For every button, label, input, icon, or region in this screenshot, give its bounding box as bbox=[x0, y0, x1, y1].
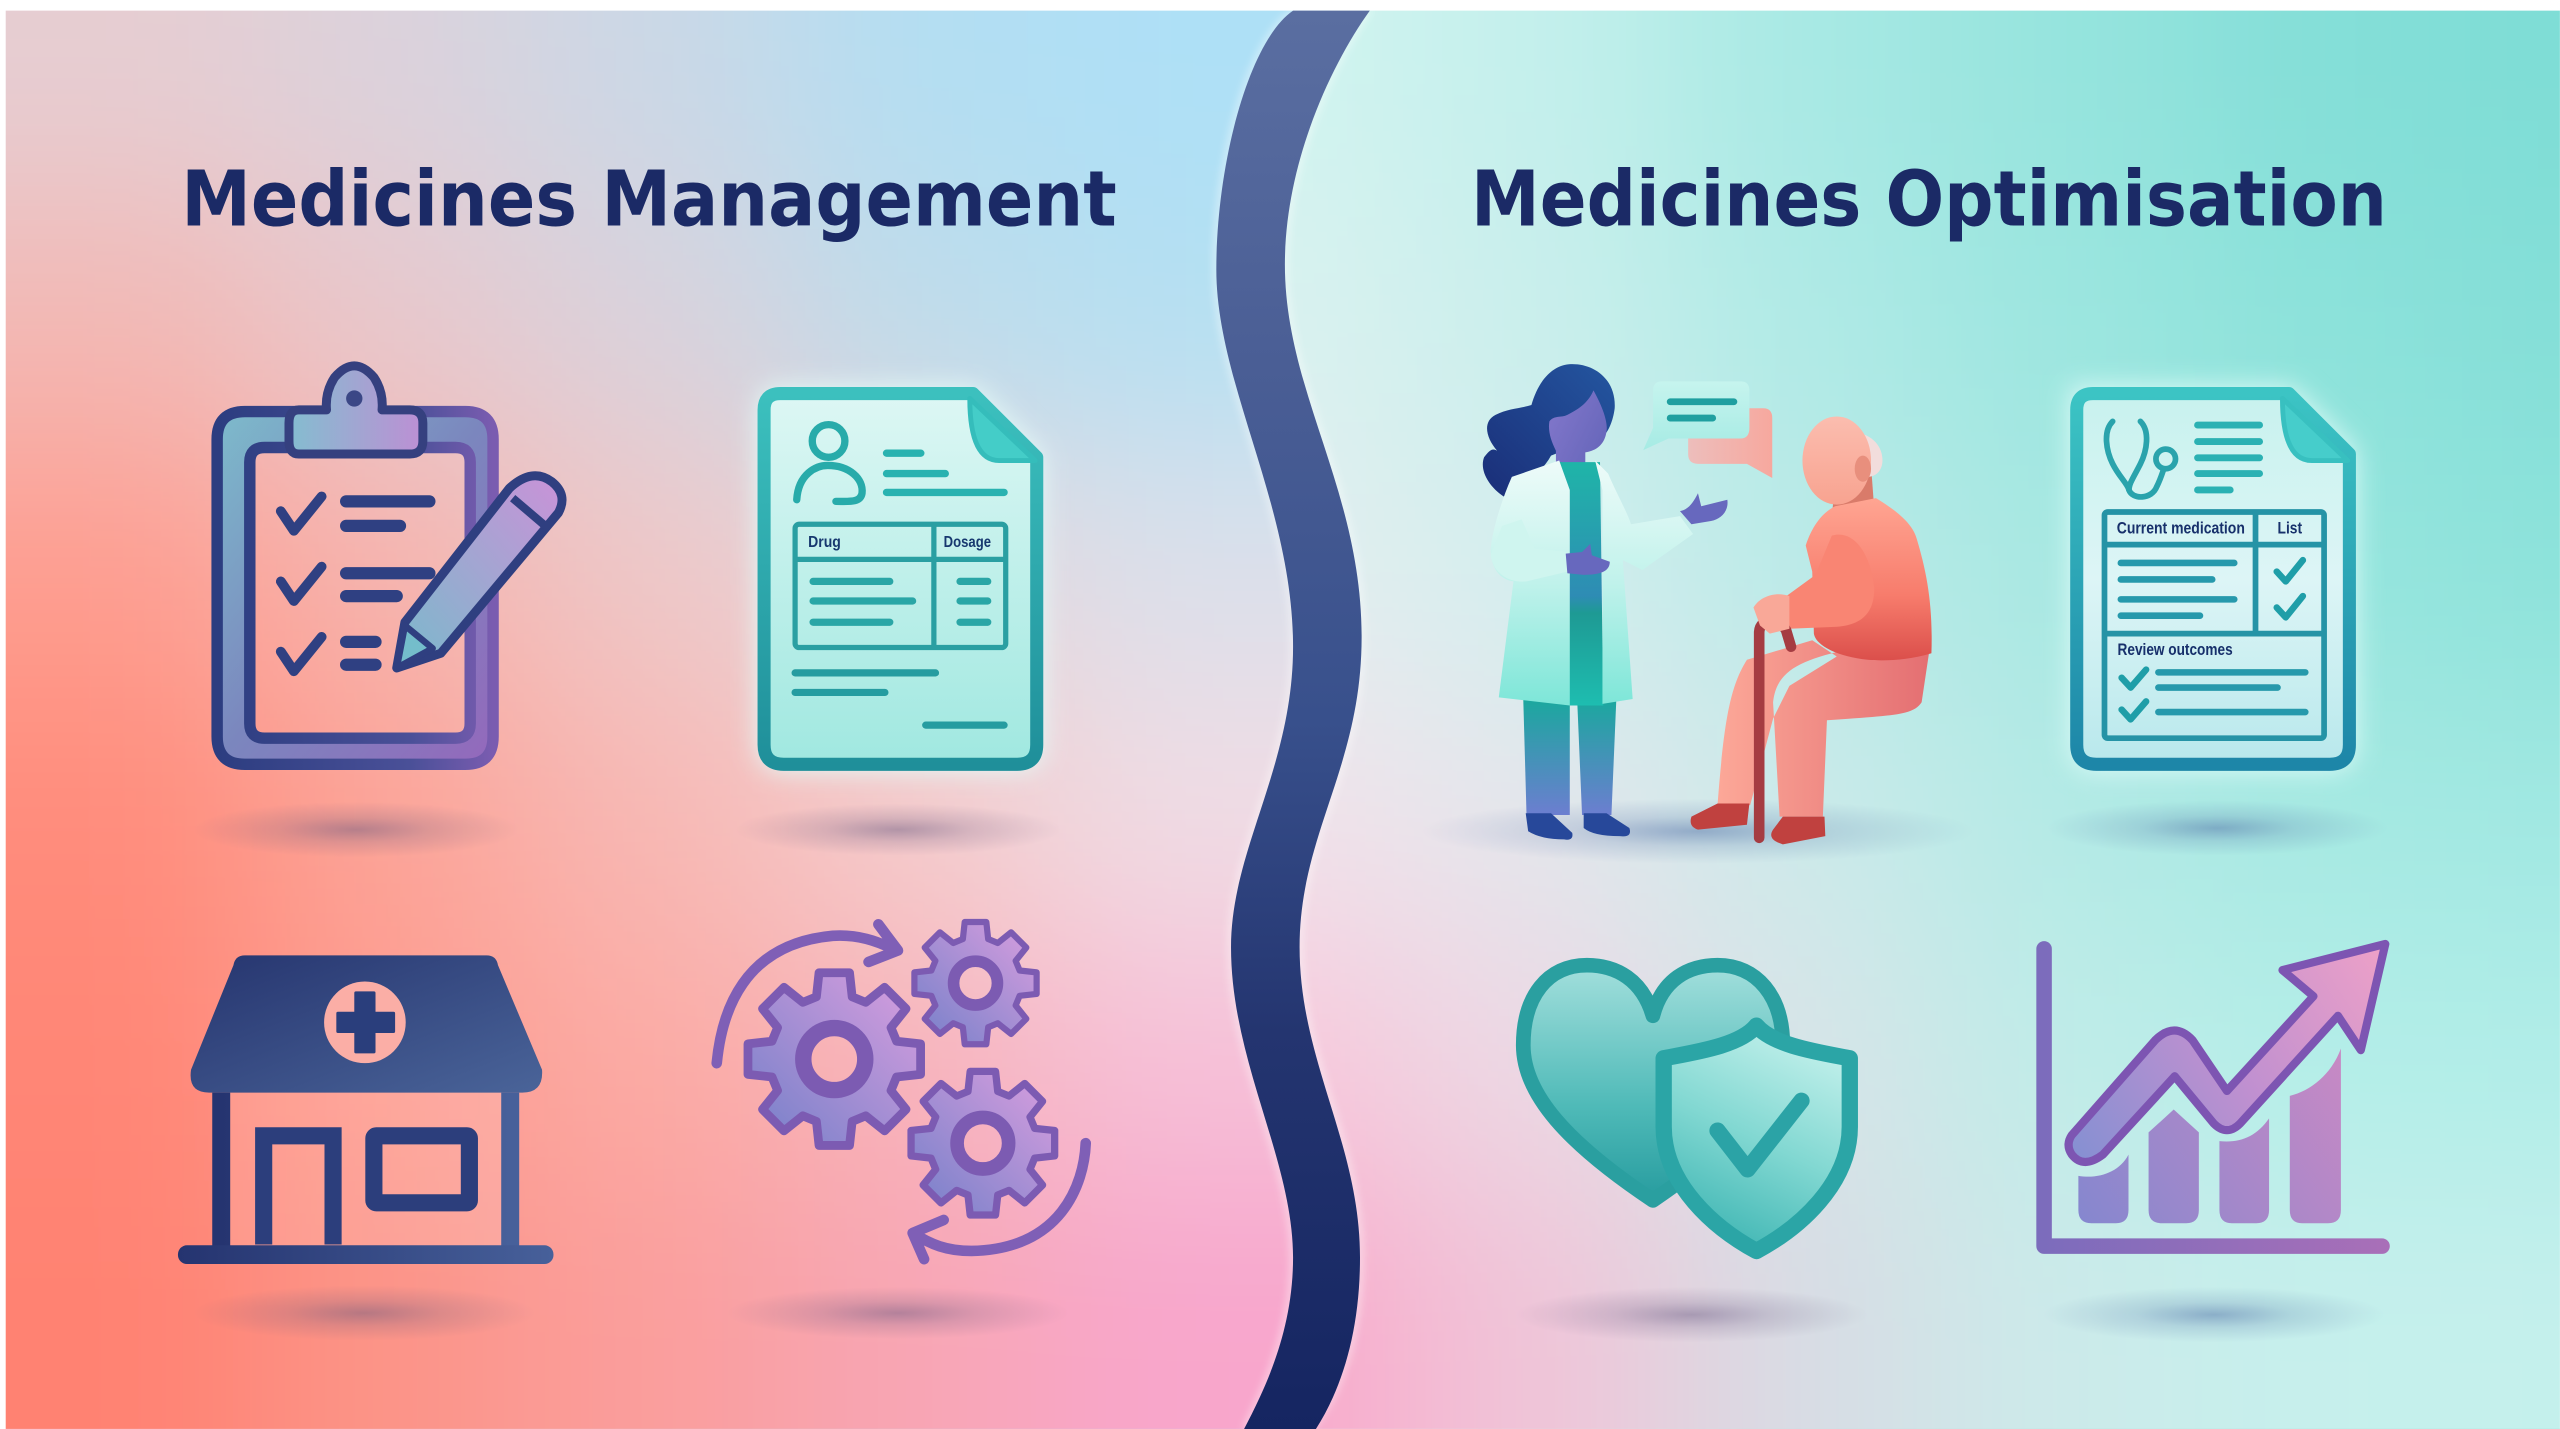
clinician hand raised bbox=[1680, 493, 1728, 524]
patient hand bbox=[1753, 594, 1789, 634]
patient shoes bbox=[1691, 804, 1825, 844]
shadow: pharmacy bbox=[193, 1285, 536, 1341]
shadow: heart and shield bbox=[1515, 1287, 1868, 1342]
document glow bbox=[764, 394, 1037, 764]
gear lower bbox=[911, 1071, 1055, 1215]
clinician trousers left bbox=[1523, 699, 1570, 815]
folded corner bbox=[970, 398, 1035, 461]
clinician hair bbox=[1483, 364, 1615, 496]
illustration: clinician consulting with older patient bbox=[1483, 364, 1932, 844]
pencil nib bbox=[397, 625, 433, 668]
icon: heart and shield bbox=[1523, 965, 1850, 1251]
pencil ferrule bbox=[513, 498, 545, 526]
section heading: Review outcomes: Review outcomes bbox=[2118, 641, 2233, 659]
panel: right gradient background bbox=[1251, 11, 2560, 1429]
speech bubble: clinician bbox=[1643, 381, 1749, 450]
clinician shoes bbox=[1526, 813, 1630, 840]
window bbox=[374, 1136, 469, 1203]
document sheet bbox=[764, 394, 1037, 764]
gear large bbox=[748, 973, 921, 1145]
table header: Dosage: Dosage bbox=[944, 534, 991, 551]
rising arrow bbox=[2069, 944, 2385, 1162]
icon: medication review document bbox=[2077, 394, 2349, 764]
title: Medicines Management: Medicines Management bbox=[181, 155, 1117, 244]
wavy divider ribbon bbox=[1216, 11, 1370, 1429]
title: Medicines Optimisation: Medicines Optimisation bbox=[1471, 155, 2387, 244]
shield bbox=[1664, 1026, 1850, 1251]
panel: left gradient background bbox=[6, 11, 1331, 1429]
shadow: review document bbox=[2046, 800, 2389, 856]
table header: List: List bbox=[2278, 520, 2303, 538]
patient torso bbox=[1806, 498, 1932, 660]
review rows bbox=[2158, 672, 2305, 712]
clinician face and neck bbox=[1549, 390, 1607, 510]
clinician scrubs bbox=[1558, 462, 1603, 706]
checklist rows bbox=[281, 496, 429, 671]
ribbon body bbox=[1216, 11, 1370, 1429]
folded corner bbox=[2282, 398, 2348, 461]
clip hole bbox=[346, 390, 362, 407]
document glow bbox=[2077, 394, 2349, 764]
clinician trousers right bbox=[1577, 699, 1616, 815]
document sheet bbox=[2077, 394, 2349, 764]
footer lines bbox=[795, 673, 1004, 725]
shadow: consultation figures bbox=[1420, 799, 1976, 864]
person icon bbox=[797, 425, 862, 501]
patient arm bbox=[1780, 535, 1874, 629]
stethoscope bbox=[2106, 421, 2176, 497]
ribbon edge glow bbox=[1216, 13, 1367, 1426]
walking cane bbox=[1759, 621, 1791, 838]
icon: rising bar chart bbox=[2044, 944, 2385, 1246]
clipboard clip bbox=[289, 366, 423, 454]
icon: gears with cycle arrows bbox=[717, 922, 1086, 1259]
patient ear bbox=[1855, 456, 1871, 482]
door bbox=[264, 1136, 333, 1244]
medication rows bbox=[2121, 563, 2234, 616]
table rows bbox=[813, 581, 988, 622]
shield check bbox=[1718, 1101, 1801, 1169]
walls bbox=[220, 1093, 511, 1246]
chart axes bbox=[2044, 949, 2382, 1246]
cycle arrow bottom bbox=[913, 1143, 1086, 1259]
clinician coat bbox=[1491, 461, 1693, 706]
clinician hand at chest bbox=[1566, 544, 1610, 575]
icon: patient medication document bbox=[764, 394, 1037, 764]
table header: Current medication: Current medication bbox=[2117, 520, 2245, 538]
chart bars bbox=[2078, 1048, 2341, 1223]
roof bbox=[191, 955, 542, 1093]
patient detail lines bbox=[887, 453, 1004, 492]
drug and dosage table bbox=[795, 524, 1006, 648]
cycle arrow top bbox=[717, 924, 898, 1063]
review ticks bbox=[2122, 670, 2146, 719]
shadow: chart bbox=[2042, 1287, 2385, 1342]
patient legs bbox=[1718, 640, 1929, 817]
base bbox=[178, 1245, 553, 1264]
shadow: document bbox=[735, 804, 1061, 856]
patient head bbox=[1802, 416, 1871, 505]
cross sign bbox=[324, 982, 406, 1063]
list ticks bbox=[2277, 560, 2303, 617]
clipboard frame bbox=[217, 412, 493, 764]
icon: pharmacy building bbox=[178, 955, 553, 1264]
shadow: gears bbox=[727, 1287, 1069, 1339]
stethoscope text lines bbox=[2198, 425, 2260, 490]
icon: clipboard checklist with pencil bbox=[217, 366, 562, 764]
wall posts bbox=[221, 1093, 510, 1246]
table header: Drug: Drug bbox=[808, 534, 841, 551]
speech bubble: patient bbox=[1688, 408, 1772, 478]
current medication and review table bbox=[2104, 512, 2324, 738]
shadow: clipboard bbox=[193, 802, 519, 857]
gear top bbox=[914, 922, 1037, 1044]
heart bbox=[1523, 965, 1783, 1200]
clinician sleeve bbox=[1491, 519, 1567, 582]
patient neck bbox=[1832, 465, 1874, 516]
patient hair bbox=[1850, 431, 1882, 477]
pencil bbox=[397, 476, 562, 668]
